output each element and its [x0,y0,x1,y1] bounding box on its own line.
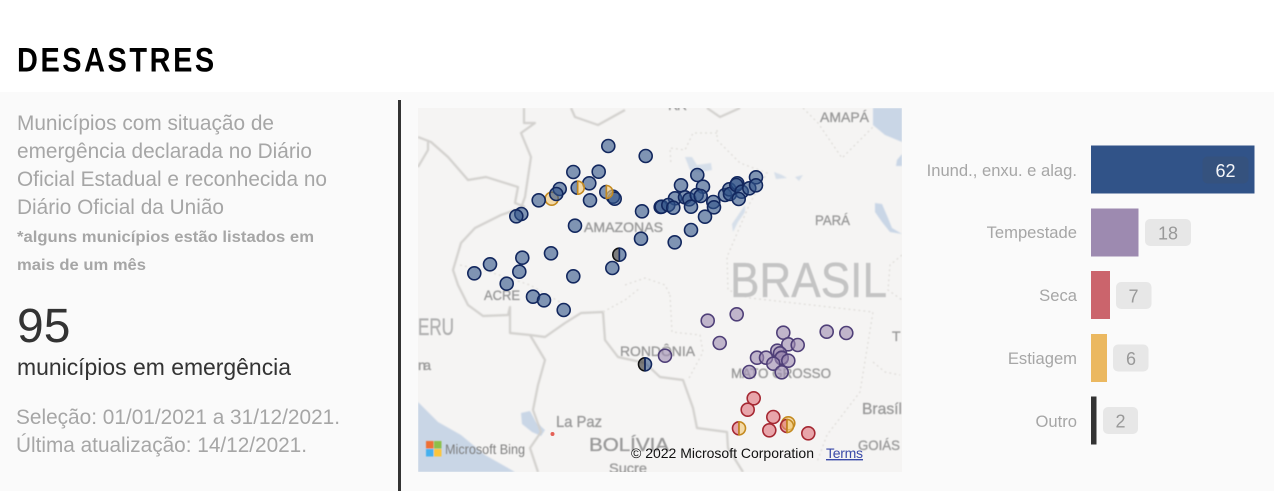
category labels: Tempestade [987,223,1077,242]
map attribution: terms link: Terms [826,445,863,461]
metric: number of municipalities: 95 [17,300,70,353]
bar chart: disasters by type [927,146,1254,444]
map place labels: PARÁ [815,212,851,228]
La Paz marker [550,432,554,436]
category labels [927,161,1078,431]
value label: 2: 2 [1115,412,1126,432]
category labels: Estiagem [1008,349,1077,368]
text block: description: Municípios com situação de [17,112,274,135]
map state borders [460,108,902,462]
map base [418,108,902,472]
text block: description: emergência declarada no Diário [17,140,312,163]
map place labels: Brasíl [862,401,902,418]
map place labels: na [418,357,431,373]
text block: selection dates: Seleção: 01/01/2021 a 31/12/2021. [16,406,340,429]
map national borders [418,108,743,472]
value label: 2 [1103,407,1138,434]
value label: 18: 18 [1158,224,1178,244]
points: dry spell [545,192,795,430]
map place labels: RR [668,97,687,113]
value label: 62: 62 [1215,161,1236,181]
category labels: Seca [1039,286,1078,305]
map place labels: Sucre [609,460,647,476]
map place labels: AMAZONAS [584,219,663,235]
points: municipalities with two disaster types [571,181,794,435]
bar: storm [1091,208,1138,256]
text block: footnote: mais de um mês [17,257,146,274]
divider [398,100,401,491]
value label: 6 [1113,344,1148,372]
points: drought [741,392,815,440]
text block: selection dates: Última atualização: 14/12/2021. [16,434,307,457]
points: storm [658,308,853,379]
map place labels: BOLÍVIA [589,435,669,455]
map place labels: AMAPÁ [820,109,870,125]
value label: 62 [1202,156,1248,184]
map place labels: La Paz [556,414,602,431]
value label: 7: 7 [1128,286,1139,306]
value label: 18 [1145,219,1191,246]
text block: footnote: *alguns municípios estão listados em [17,229,314,246]
map place labels: BRASIL [730,254,887,308]
bar: dry spell [1091,334,1107,382]
text block: description: Diário Oficial da União [17,196,224,219]
map place labels [418,97,902,476]
map place labels: ERU [418,314,454,341]
map panel [418,97,902,476]
map attribution: Bing: Microsoft Bing [445,441,525,457]
title: DESASTRES [17,40,214,79]
text block: footnote [17,229,314,274]
bar: other [1091,396,1096,444]
category labels: Outro [1035,412,1077,431]
text block: description: Oficial Estadual e reconhecida no [17,168,327,191]
category labels: Inund., enxu. e alag. [927,161,1077,180]
value label: 7 [1116,282,1152,309]
map place labels: T [892,328,901,344]
map place labels: ACRE [484,287,520,303]
map attribution: copyright: © 2022 Microsoft Corporation [631,445,814,461]
bar: drought [1091,271,1110,319]
icon: Microsoft logo [426,441,442,456]
bar: flood [1091,146,1254,194]
text block: selection dates [16,406,340,457]
panel: description and summary [16,112,340,457]
map water [418,108,902,472]
points: flood [468,140,762,316]
map place labels: GOIÁS [858,437,900,453]
map place labels: RONDÔNIA [620,343,696,359]
text block: description [17,112,327,219]
map place labels: MATO GROSSO [731,365,831,381]
value label: 6: 6 [1126,349,1136,369]
metric label: municípios em emergência [17,354,291,380]
